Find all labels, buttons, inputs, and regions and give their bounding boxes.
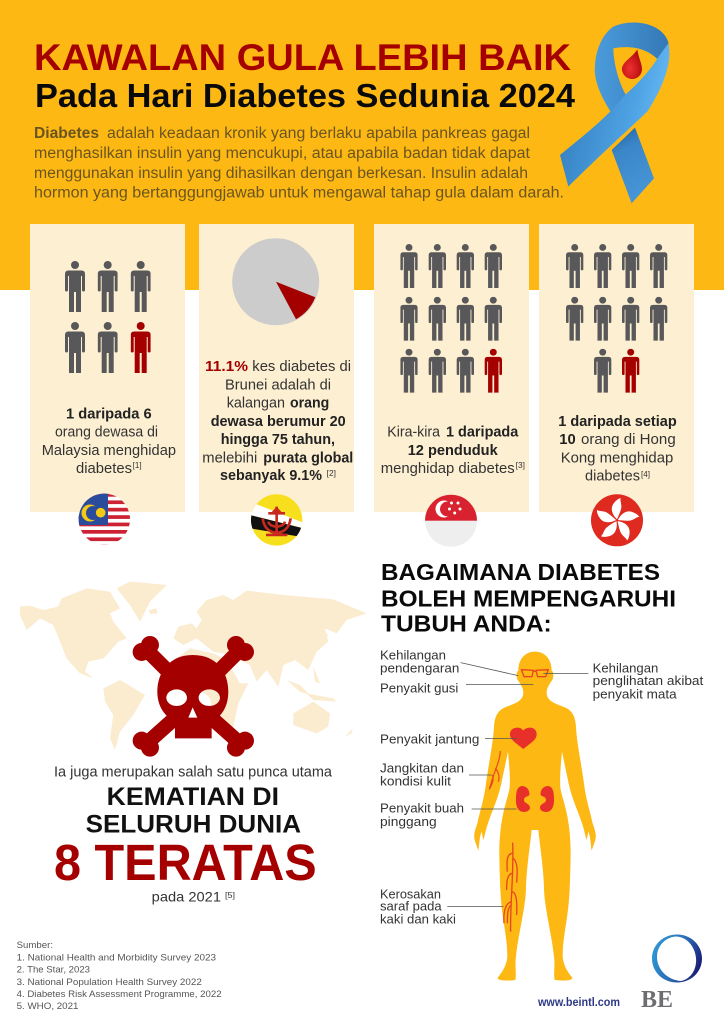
body labels: penglihatan akibat: [593, 673, 704, 688]
icon: arm blood vessels: [489, 751, 500, 789]
sources: [17, 940, 222, 1012]
text: Brunei statistic: dewasa berumur 20: [211, 413, 346, 430]
text block: leading cause of death: SELURUH DUNIA: [86, 810, 301, 838]
intro paragraph: Diabetes: [34, 125, 99, 142]
body labels: penyakit mata: [593, 686, 677, 701]
text: Hong Kong statistic: [558, 413, 677, 484]
sources: 3. National Population Health Survey 2022: [17, 977, 202, 988]
text: Singapore statistic: 1 daripada: [446, 424, 519, 441]
text block: leading cause of death: 8 TERATAS: [54, 834, 317, 891]
text block: leading cause of death: [5]: [225, 891, 235, 900]
text: Brunei statistic: [2]: [327, 469, 336, 478]
panel: Brunei: [199, 224, 354, 512]
text: Brunei statistic: melebihi: [202, 449, 257, 466]
text: Hong Kong statistic: orang di Hong: [581, 431, 676, 448]
body labels: Kehilangan: [380, 647, 446, 662]
sources: 4. Diabetes Risk Assessment Programme, 2022: [17, 989, 222, 1000]
icon: glasses: [521, 670, 548, 677]
intro paragraph: [34, 125, 564, 202]
body labels: saraf pada: [380, 899, 442, 914]
text: Malaysia statistic: [42, 406, 176, 477]
intro paragraph: adalah keadaan kronik yang berlaku apabila pankreas gagal: [107, 125, 530, 142]
intro paragraph: menghasilkan insulin yang mencukupi, atau apabila badan tidak dapat: [34, 145, 531, 162]
body labels: pinggang: [380, 814, 437, 829]
text: Brunei statistic: kalangan: [227, 395, 285, 412]
text: Hong Kong statistic: 1 daripada setiap: [558, 413, 677, 430]
intro paragraph: menggunakan insulin yang dihasilkan dengan berkesan. Insulin adalah: [34, 165, 528, 182]
text: Hong Kong statistic: [4]: [641, 470, 650, 479]
body silhouette: [474, 652, 596, 980]
title: KAWALAN GULA LEBIH BAIK: [34, 37, 571, 78]
text block: leading cause of death: Ia juga merupakan salah satu punca utama: [54, 765, 333, 781]
text: Hong Kong statistic: 10: [559, 431, 576, 448]
text: Malaysia statistic: [1]: [133, 461, 142, 470]
body labels: Penyakit jantung: [380, 731, 479, 746]
icon: Brunei flag: [250, 493, 303, 547]
icon: skull and crossbones: [133, 636, 254, 757]
body diagram: [380, 647, 704, 980]
sources: Sumber:: [17, 940, 53, 951]
body labels: Penyakit gusi: [380, 680, 458, 695]
logo: BE: BE: [641, 987, 673, 1013]
text: Brunei statistic: kes diabetes di: [252, 358, 351, 375]
text: Brunei statistic: orang: [290, 395, 329, 412]
skull: [157, 655, 228, 738]
sources: 1. National Health and Morbidity Survey 2023: [17, 953, 216, 964]
icon: kidneys: [516, 786, 554, 812]
text: Brunei statistic: 11.1%: [205, 358, 248, 375]
text: Malaysia statistic: orang dewasa di: [55, 424, 158, 441]
text: Singapore statistic: menghidap diabetes: [381, 460, 515, 477]
heading: how diabetes affects the body: TUBUH ANDA:: [381, 611, 552, 637]
text: Singapore statistic: [3]: [516, 461, 525, 470]
body labels: Penyakit buah: [380, 801, 464, 816]
text: Brunei statistic: Brunei adalah di: [225, 376, 331, 393]
panel: Hong Kong: [539, 224, 694, 512]
leader lines: [447, 663, 588, 907]
pictogram: 1 in 12: [400, 244, 502, 393]
text: Malaysia statistic: 1 daripada 6: [66, 406, 152, 423]
icon: Hong Kong flag: [591, 494, 643, 546]
heading: how diabetes affects the body: [381, 559, 676, 637]
text: Brunei statistic: hingga 75 tahun,: [221, 431, 335, 448]
title: Pada Hari Diabetes Sedunia 2024: [35, 77, 576, 114]
text: Singapore statistic: 12 penduduk: [408, 442, 498, 459]
sources: 5. WHO, 2021: [17, 1001, 79, 1012]
body labels: kaki dan kaki: [380, 912, 456, 927]
icon: Malaysia flag: [78, 494, 130, 545]
bones: [133, 636, 254, 757]
icon: Singapore flag: [425, 494, 477, 548]
logo: BE: [641, 934, 702, 1013]
pictogram: 1 in 6: [65, 261, 151, 373]
text: Brunei statistic: sebanyak 9.1%: [220, 467, 322, 484]
world map: [20, 582, 367, 750]
icon: blue ribbon with blood drop: [560, 23, 669, 203]
heading: how diabetes affects the body: BOLEH MEMPENGARUHI: [381, 586, 676, 612]
intro paragraph: hormon yang bertanggungjawab untuk mengawal tahap gula dalam darah.: [34, 184, 564, 202]
heading: how diabetes affects the body: BAGAIMANA DIABETES: [381, 559, 660, 585]
icon: heart: [510, 728, 537, 749]
text: Brunei statistic: [202, 358, 353, 484]
panel: Singapore: [374, 224, 529, 512]
pictogram: 1 in 10: [566, 244, 667, 393]
text: Hong Kong statistic: Kong menghidap: [561, 449, 673, 466]
icon: leg nerves: [504, 843, 517, 932]
pie chart: 11.1%: [232, 238, 319, 325]
text: Malaysia statistic: Malaysia menghidap: [42, 442, 176, 459]
text: Hong Kong statistic: diabetes: [585, 467, 640, 484]
body labels: [380, 647, 704, 927]
text: Brunei statistic: purata global: [263, 449, 353, 466]
body labels: Kerosakan: [380, 886, 441, 901]
body labels: Kehilangan: [593, 660, 658, 675]
body labels: pendengaran: [380, 660, 459, 675]
text block: leading cause of death: pada 2021: [152, 889, 221, 905]
sources: 2. The Star, 2023: [17, 965, 90, 976]
title: [34, 37, 576, 114]
yellow header background: [0, 0, 724, 290]
body labels: kondisi kulit: [380, 773, 451, 788]
text: Singapore statistic: [381, 424, 525, 477]
text block: leading cause of death: KEMATIAN DI: [107, 783, 279, 811]
text block: leading cause of death: [54, 765, 333, 905]
panel: Malaysia: [30, 224, 185, 512]
website url: www.beintl.com: [537, 997, 620, 1009]
text: Malaysia statistic: diabetes: [76, 460, 132, 477]
text: Singapore statistic: Kira-kira: [387, 424, 441, 441]
body labels: Jangkitan dan: [380, 761, 464, 776]
